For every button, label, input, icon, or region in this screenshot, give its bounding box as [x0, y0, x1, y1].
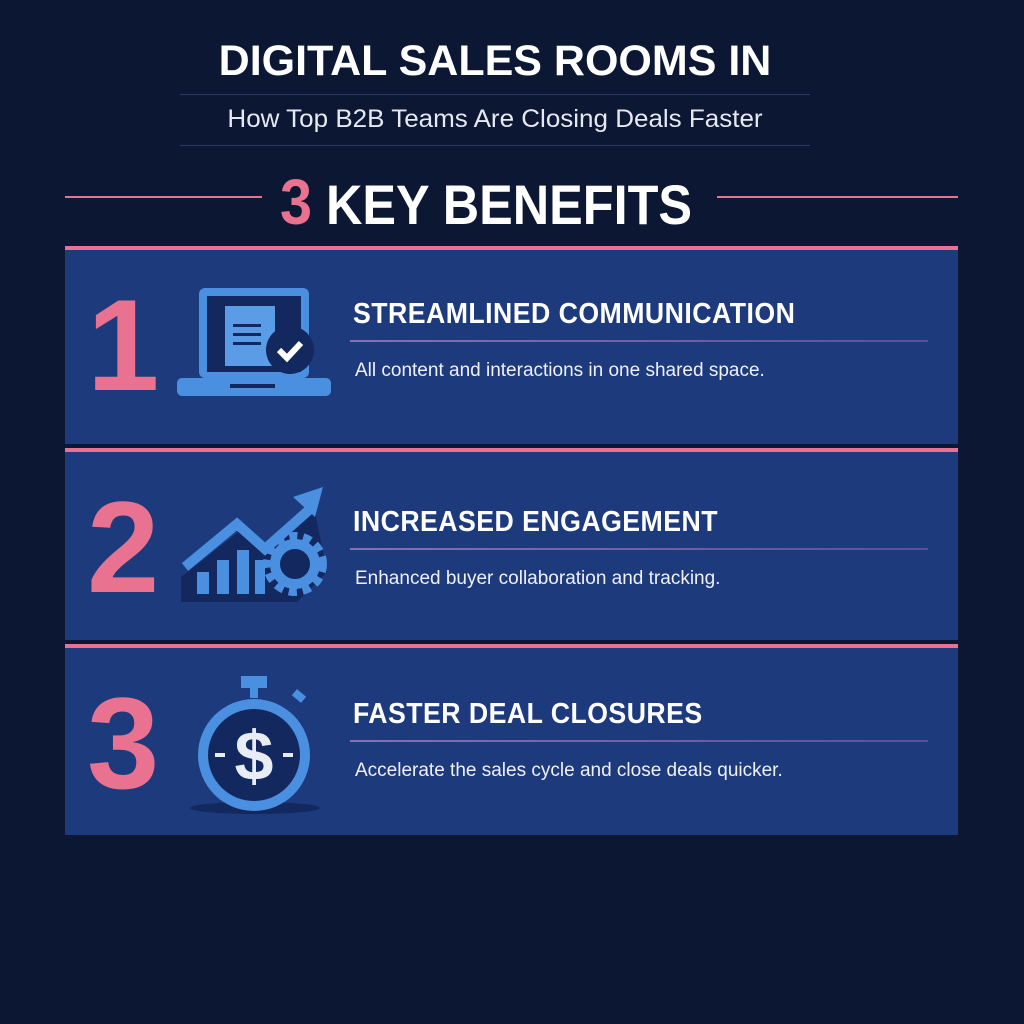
description: Enhanced buyer collaboration and tracking.	[355, 568, 720, 589]
title: DIGITAL SALES ROOMS IN	[219, 37, 771, 85]
subtitle	[180, 94, 810, 146]
number 2: 2	[87, 474, 159, 620]
description: Accelerate the sales cycle and close deals quicker.	[355, 760, 783, 781]
heading: STREAMLINED COMMUNICATION	[353, 298, 795, 330]
section heading: 3 KEY BENEFITS	[280, 166, 692, 238]
icon: chart and gear	[181, 487, 327, 602]
heading: INCREASED ENGAGEMENT	[353, 506, 718, 538]
panel: increased engagement	[65, 448, 958, 640]
number 3: 3	[87, 670, 159, 816]
icon: laptop	[177, 288, 331, 396]
icon: stopwatch dollar	[190, 676, 320, 814]
panel: faster deal closures	[65, 644, 958, 835]
subtitle: How Top B2B Teams Are Closing Deals Faster	[227, 105, 763, 133]
panel: streamlined communication	[65, 246, 958, 444]
number 1: 1	[87, 272, 159, 418]
description: All content and interactions in one shared space.	[355, 360, 765, 381]
heading: FASTER DEAL CLOSURES	[353, 698, 703, 730]
icon: stopwatch dollar: $	[235, 717, 273, 795]
